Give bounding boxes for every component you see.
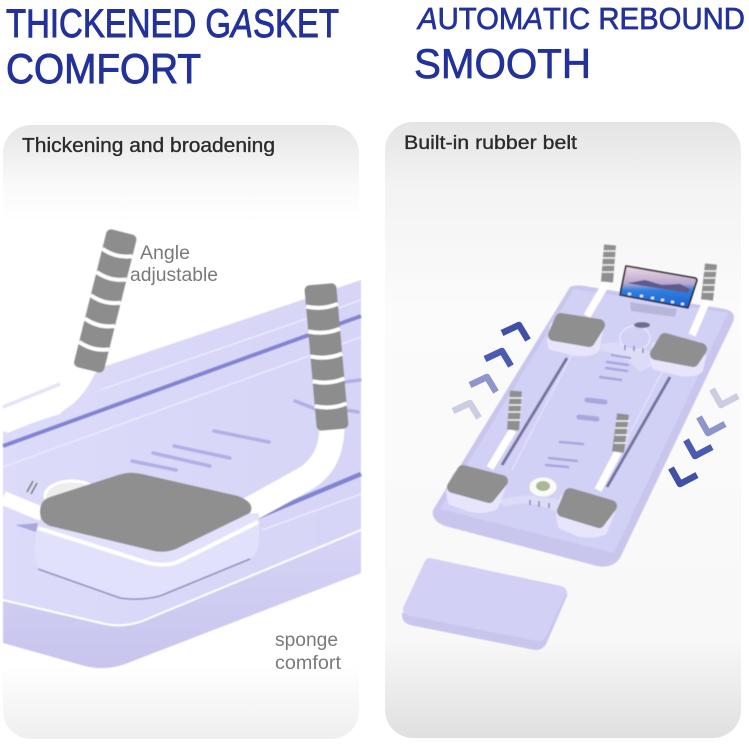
grips bbox=[513, 245, 711, 452]
panel: automatic rebound bbox=[385, 122, 741, 738]
close-up board illustration bbox=[3, 228, 361, 668]
screw bbox=[27, 481, 37, 494]
highlight lines bbox=[3, 300, 361, 530]
center belt bottom bbox=[495, 495, 560, 512]
groove left bbox=[502, 358, 567, 465]
center ribs bbox=[512, 352, 662, 490]
board front edge bbox=[3, 530, 361, 668]
chevrons down-right bbox=[671, 389, 738, 484]
white arm right bbox=[245, 428, 332, 512]
grip left bbox=[73, 228, 137, 374]
board surface bbox=[3, 280, 361, 668]
label: angle adjustable bbox=[130, 243, 218, 286]
pedal base bbox=[35, 513, 259, 598]
pedal cushions bbox=[453, 319, 701, 522]
panel: thickened gasket bbox=[3, 125, 361, 739]
center belt top bbox=[580, 342, 660, 372]
slots bbox=[546, 355, 630, 467]
grip bands bbox=[508, 251, 718, 443]
heading: automatic rebound smooth: SMOOTH bbox=[414, 40, 591, 87]
board groove lower bbox=[258, 474, 361, 517]
label: angle adjustable: Angle bbox=[140, 243, 190, 264]
board groove upper bbox=[3, 316, 361, 446]
chrome pivot bbox=[45, 481, 99, 511]
pedal base shadow bbox=[38, 559, 250, 599]
heading: automatic rebound smooth bbox=[414, 1, 745, 87]
belt marks bbox=[530, 345, 643, 508]
tube lower left bbox=[3, 498, 42, 514]
heading: automatic rebound smooth: AUTOMATIC REBOUND bbox=[416, 1, 745, 36]
label: sponge comfort bbox=[275, 630, 342, 674]
rail strip bbox=[3, 384, 60, 407]
pedal rim bbox=[38, 522, 258, 565]
dial bottom bbox=[529, 477, 557, 497]
subheading: thickening and broadening: Thickening and broadening bbox=[22, 135, 275, 157]
pedal bases bbox=[449, 325, 703, 535]
dial top bbox=[620, 326, 650, 350]
groove right bbox=[607, 377, 670, 487]
slots bbox=[132, 380, 360, 470]
pedal cushion bbox=[40, 473, 252, 552]
small slot top bbox=[634, 322, 650, 328]
board inner surface bbox=[440, 289, 728, 553]
heading: thickened gasket comfort bbox=[6, 2, 339, 92]
oval slots bbox=[579, 400, 605, 419]
foot pad front bbox=[402, 587, 567, 650]
panel background right bbox=[385, 122, 741, 738]
label: sponge comfort: comfort bbox=[275, 653, 342, 674]
panel background left bbox=[3, 125, 359, 739]
subheading: built-in rubber belt: Built-in rubber belt bbox=[404, 133, 578, 154]
grip right bbox=[304, 283, 349, 431]
label: sponge comfort: sponge bbox=[275, 630, 338, 651]
chevrons up-left bbox=[453, 325, 528, 418]
heading: thickened gasket comfort: COMFORT bbox=[6, 45, 201, 92]
heading: thickened gasket comfort: THICKENED GASKET bbox=[6, 2, 339, 46]
phone dock bbox=[630, 302, 677, 317]
full device illustration bbox=[402, 245, 734, 650]
foot pad top bbox=[403, 558, 566, 641]
front edge highlight bbox=[3, 530, 361, 625]
label: angle adjustable: adjustable bbox=[130, 265, 218, 286]
arms bbox=[490, 282, 707, 490]
phone bbox=[620, 266, 697, 308]
white arm left bbox=[3, 365, 88, 424]
board base bbox=[433, 286, 734, 567]
